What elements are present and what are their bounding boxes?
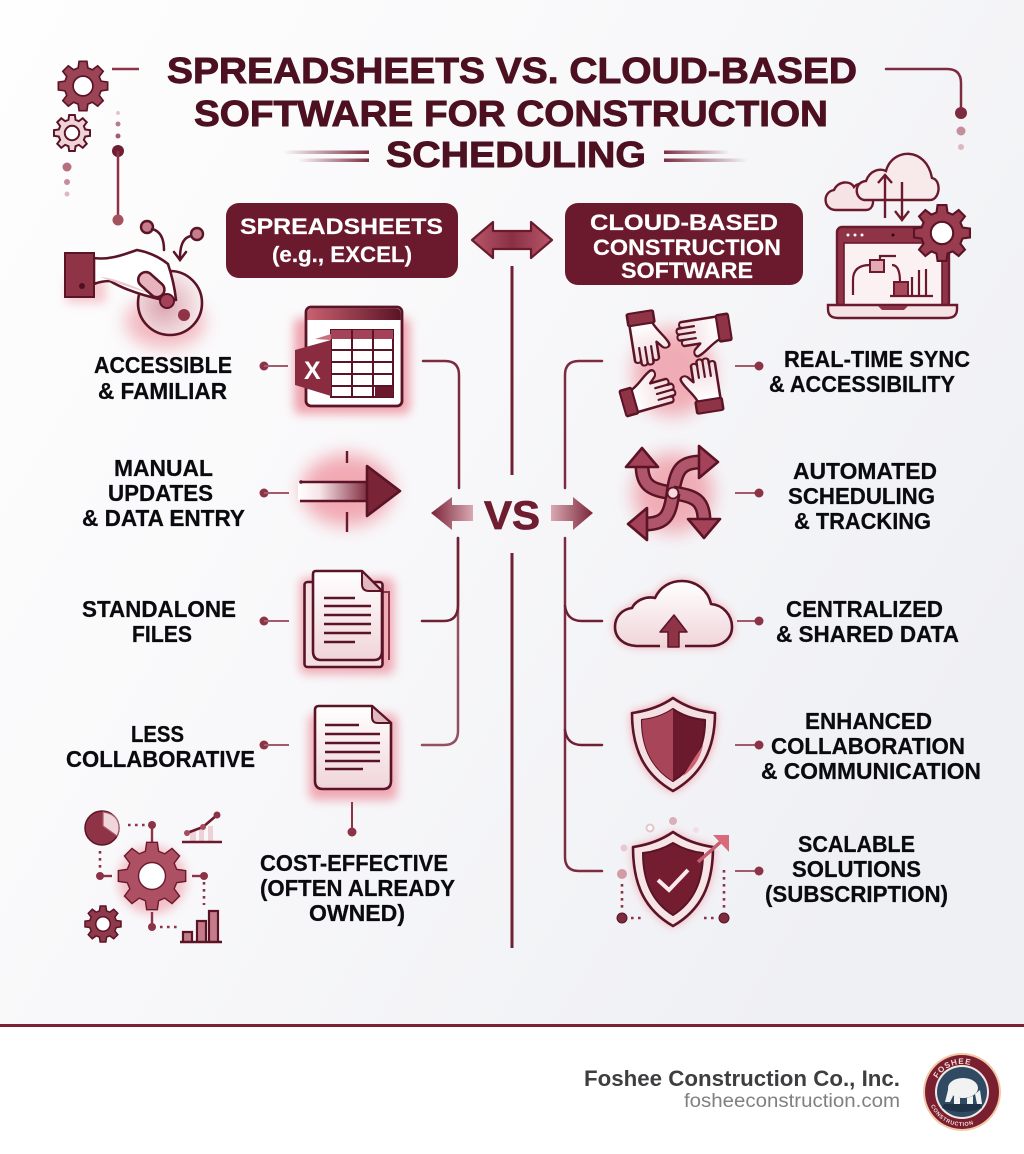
footer: Foshee Construction Co., Inc. [584, 1066, 900, 1091]
panel heading: spreadsheets [226, 203, 458, 278]
logo: Foshee elephant badge: FOSHEE [933, 1058, 971, 1078]
label: less collaborative [66, 721, 289, 772]
label: scalable solutions: (SUBSCRIPTION) [765, 881, 948, 907]
icon: swirl of four arrows [626, 446, 720, 540]
label: scalable solutions: SOLUTIONS [792, 856, 921, 882]
centre divider [510, 266, 514, 948]
label: automated scheduling [735, 458, 937, 534]
label: automated scheduling: & TRACKING [794, 508, 931, 534]
logo: Foshee elephant badge: CONSTRUCTION [931, 1104, 973, 1126]
icon: single document [309, 706, 397, 836]
label: centralized & shared data [737, 596, 959, 647]
title accent lines [283, 150, 748, 162]
title: SOFTWARE FOR CONSTRUCTION [194, 93, 828, 134]
title: SCHEDULING [386, 134, 646, 175]
label: cost-effective: COST-EFFECTIVE [260, 850, 448, 876]
icon: shield [632, 698, 715, 791]
icon: excel spreadsheet: X [304, 357, 321, 385]
title: SPREADSHEETS VS. CLOUD-BASED [167, 50, 857, 91]
panel heading: spreadsheets: SPREADSHEETS [240, 214, 443, 239]
label: manual updates & data entry: UPDATES [108, 480, 213, 506]
label: accessible & familiar: & FAMILIAR [98, 378, 227, 404]
label: enhanced collaboration [735, 708, 981, 784]
label: less collaborative: LESS [131, 721, 184, 747]
panel heading: cloud-based software: CLOUD-BASED [590, 210, 778, 235]
label: manual updates & data entry: & DATA ENTRY [82, 505, 245, 531]
label: standalone files: FILES [132, 621, 192, 647]
panel heading: spreadsheets: (e.g., EXCEL) [272, 242, 412, 267]
label: manual updates & data entry [82, 455, 289, 531]
icon: hand pressing a disc [65, 221, 205, 348]
label: enhanced collaboration: COLLABORATION [771, 733, 965, 759]
label: manual updates & data entry: MANUAL [114, 455, 213, 481]
label: real-time sync: & ACCESSIBILITY [769, 371, 955, 397]
footer [0, 1024, 1024, 1154]
label: real-time sync [735, 346, 970, 397]
icon: manual update arrow [298, 451, 400, 532]
label: automated scheduling: SCHEDULING [788, 483, 935, 509]
logo: Foshee elephant badge [923, 1053, 1001, 1131]
footer: fosheeconstruction.com [684, 1090, 900, 1112]
panel heading: cloud-based software: SOFTWARE [621, 258, 753, 283]
icon: four hands [616, 308, 734, 416]
top-right connector and dots [886, 69, 967, 150]
label: cost-effective: OWNED) [309, 900, 405, 926]
icon: cloud upload [615, 581, 732, 647]
icon: top-left gears and dots [54, 61, 139, 225]
label: automated scheduling: AUTOMATED [793, 458, 937, 484]
arrow: double-headed between headings [472, 222, 552, 258]
label: centralized & shared data: & SHARED DATA [776, 621, 959, 647]
icon: excel spreadsheet [294, 307, 410, 414]
label: enhanced collaboration: ENHANCED [805, 708, 932, 734]
label: cost-effective [260, 850, 455, 926]
label: scalable solutions: SCALABLE [798, 831, 915, 857]
bracket: spreadsheets connectors [422, 361, 459, 745]
title [167, 50, 857, 175]
icon: shield with check and growth arrow [617, 817, 729, 926]
label: standalone files: STANDALONE [82, 596, 236, 622]
VS centre marker with arrows [431, 494, 593, 538]
label: real-time sync: REAL-TIME SYNC [784, 346, 970, 372]
label: enhanced collaboration: & COMMUNICATION [761, 758, 981, 784]
panel heading: cloud-based software: CONSTRUCTION [593, 235, 781, 260]
label: accessible & familiar [94, 352, 288, 404]
icon: standalone file stack [300, 571, 394, 674]
label: centralized & shared data: CENTRALIZED [786, 596, 943, 622]
label: accessible & familiar: ACCESSIBLE [94, 352, 232, 378]
label: less collaborative: COLLABORATIVE [66, 746, 255, 772]
icon: cloud laptop with gear [826, 154, 970, 318]
label: scalable solutions [735, 831, 948, 907]
label: standalone files [82, 596, 289, 647]
VS centre marker with arrows: VS [484, 494, 540, 538]
icon: gear analytics cluster [85, 811, 222, 942]
bracket: cloud software connectors [565, 361, 602, 871]
panel heading: cloud-based software [565, 203, 803, 285]
label: cost-effective: (OFTEN ALREADY [260, 875, 455, 901]
